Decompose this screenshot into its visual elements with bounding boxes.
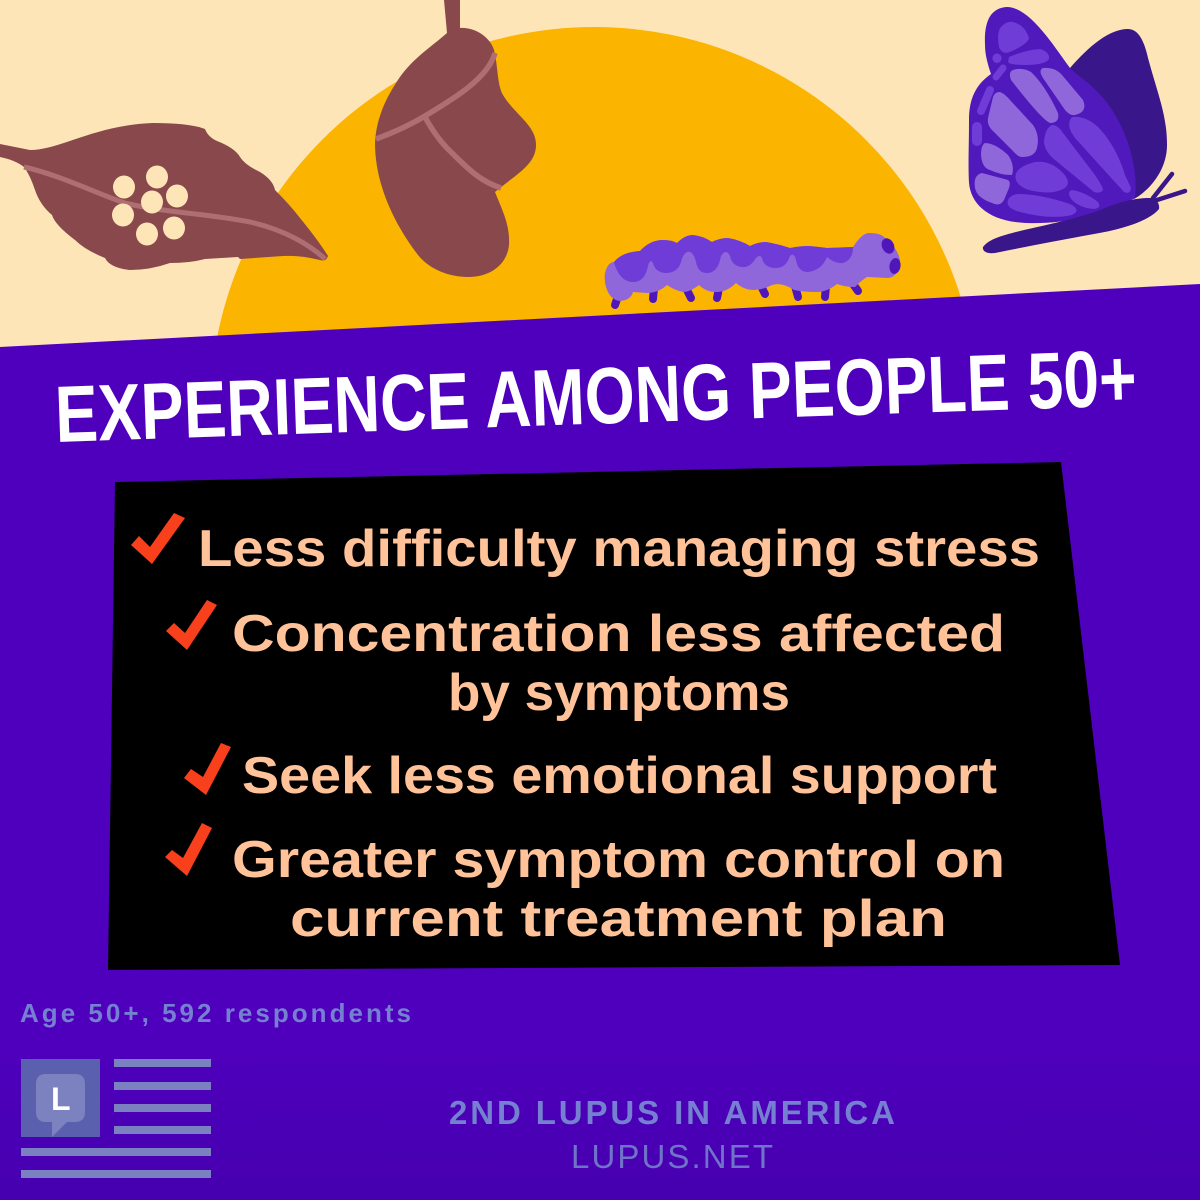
list item 4: current treatment plan [290, 890, 947, 948]
panel: black list box [108, 462, 1120, 970]
caterpillar eyes [879, 236, 902, 275]
list item 2: by symptoms [448, 664, 790, 722]
logo: newspaper icon [21, 1059, 211, 1178]
icon: caterpillar [605, 233, 902, 305]
far wing [1070, 29, 1167, 199]
footer band [0, 1035, 1200, 1200]
wing patches dark [998, 22, 1131, 217]
icon: leaf with eggs [0, 123, 328, 270]
respondents note: Age 50+, 592 respondents [20, 998, 411, 1028]
wing patch small marks [977, 58, 1003, 141]
check mark 2 [166, 600, 217, 650]
list item 2 [232, 605, 1005, 722]
butterfly body [983, 198, 1159, 253]
eggs [112, 166, 188, 246]
list item 3: Seek less emotional support [242, 747, 997, 805]
logo letter: L [51, 1081, 71, 1117]
caterpillar body [605, 233, 900, 301]
chrysalis veins [376, 53, 501, 188]
list item 2: Concentration less affected [232, 605, 1005, 663]
cream sky background [0, 0, 1200, 360]
footer site name: LUPUS.NET [571, 1138, 773, 1175]
list item 4: Greater symptom control on [232, 831, 1005, 889]
caterpillar legs [615, 284, 858, 305]
wing patches light [975, 68, 1084, 204]
check mark 3 [184, 743, 231, 795]
orange sun [210, 27, 978, 795]
near wing [969, 7, 1136, 223]
footer title: 2ND LUPUS IN AMERICA [449, 1094, 895, 1131]
speech bubble [36, 1074, 85, 1137]
list item 4 [232, 831, 1005, 948]
purple main background [0, 284, 1200, 1200]
headline bars [21, 1059, 211, 1178]
antennae [1153, 174, 1185, 200]
icon: chrysalis [375, 0, 536, 277]
check mark 4 [165, 823, 212, 876]
leaf vein [24, 167, 325, 259]
check mark 1 [131, 513, 185, 564]
list item 1: Less difficulty managing stress [198, 520, 1040, 578]
caterpillar back stripe [614, 235, 853, 282]
icon: butterfly [969, 7, 1185, 253]
